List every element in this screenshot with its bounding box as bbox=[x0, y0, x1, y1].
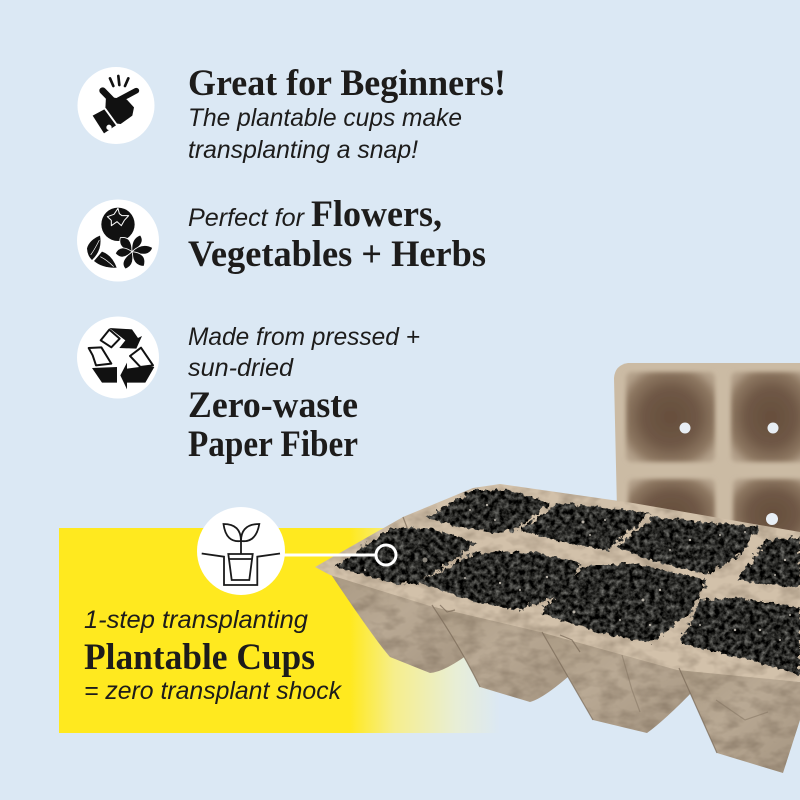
photo: front tray with soil bbox=[315, 484, 800, 773]
text: plantable cups callout: Plantable Cups bbox=[84, 637, 315, 678]
icon: seedling in pot bbox=[197, 507, 285, 595]
panel: yellow callout background bbox=[59, 528, 500, 733]
text: perfect for flowers vegetables herbs: Perfect for bbox=[188, 204, 306, 232]
text: zero-waste paper fiber bbox=[188, 323, 420, 465]
heading: great for beginners: transplanting a snap! bbox=[188, 136, 418, 164]
heading: great for beginners: Great for Beginners! bbox=[188, 63, 506, 104]
heading: great for beginners bbox=[188, 63, 506, 164]
soil cells bbox=[335, 490, 800, 675]
icon: snapping hand bbox=[78, 67, 154, 144]
text: zero-waste paper fiber: Zero-waste bbox=[188, 385, 358, 426]
text: perfect for flowers vegetables herbs: Vegetables + Herbs bbox=[188, 234, 486, 275]
photo: empty back tray bbox=[614, 363, 800, 549]
heading: great for beginners: The plantable cups make bbox=[188, 104, 462, 132]
text: zero-waste paper fiber: Made from pressed + bbox=[188, 323, 420, 351]
text: perfect for flowers vegetables herbs bbox=[188, 194, 486, 275]
text: perfect for flowers vegetables herbs: Flowers, bbox=[311, 194, 442, 235]
callout connector line bbox=[280, 545, 396, 565]
cup fold edges and creases bbox=[403, 517, 768, 753]
icon: recycle symbol bbox=[77, 316, 159, 398]
icon: tomato, leaves and flower bbox=[77, 200, 159, 282]
text: plantable cups callout bbox=[84, 606, 342, 705]
text: plantable cups callout: 1-step transplanting bbox=[84, 606, 308, 634]
text: plantable cups callout: = zero transplant shock bbox=[84, 677, 342, 705]
text: zero-waste paper fiber: sun-dried bbox=[188, 354, 294, 382]
soil specks bbox=[364, 504, 791, 641]
tray cups bbox=[315, 484, 800, 773]
text: zero-waste paper fiber: Paper Fiber bbox=[188, 424, 358, 465]
